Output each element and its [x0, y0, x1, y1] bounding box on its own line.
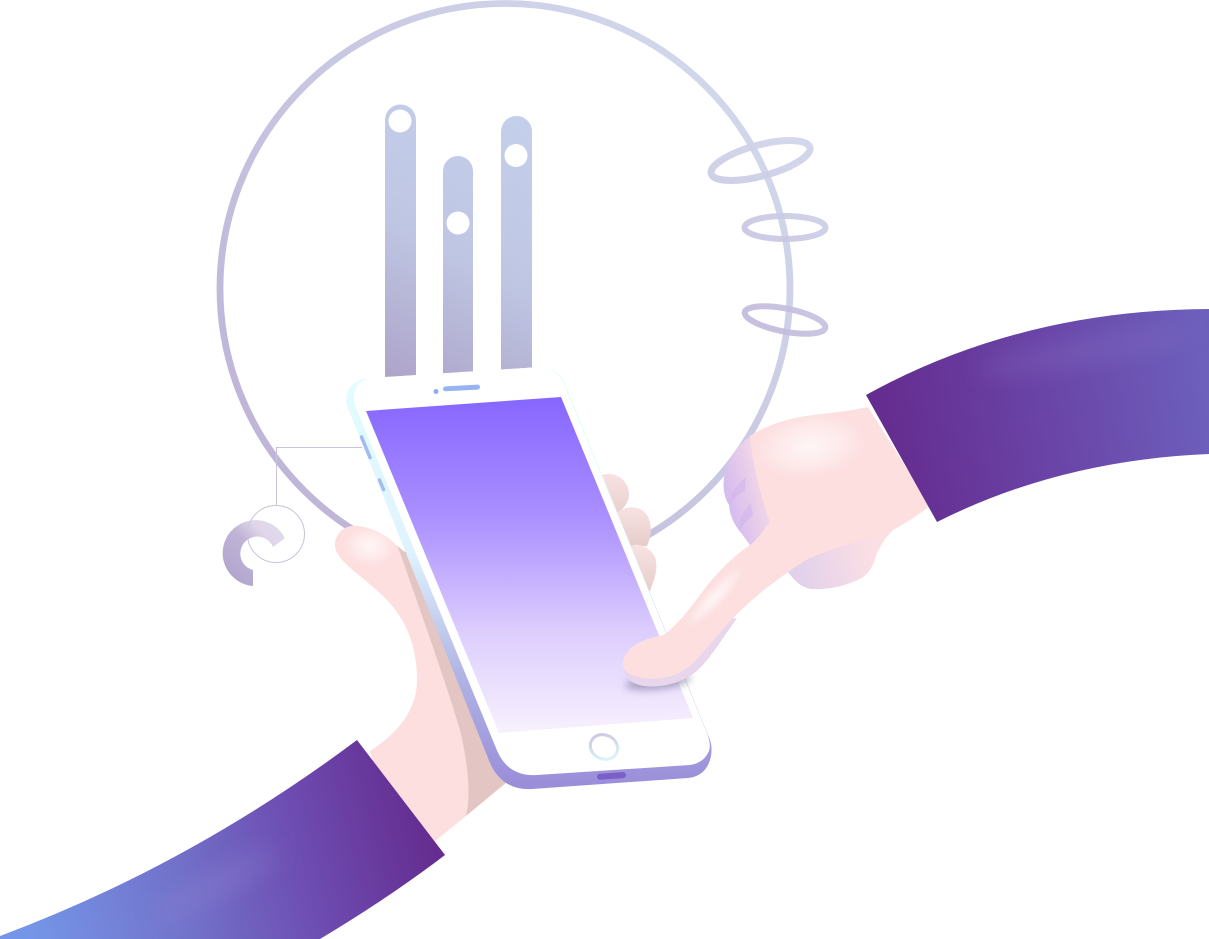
- ring 2: [744, 216, 826, 239]
- finger underside: [624, 618, 737, 686]
- home button: [586, 730, 622, 764]
- C-shaped arc icon: [223, 520, 285, 586]
- hand highlight: [750, 407, 870, 485]
- screen: [366, 397, 693, 733]
- hand and pointing finger: [623, 407, 930, 679]
- right arm: [623, 309, 1209, 692]
- bar 1: [385, 104, 416, 385]
- left arm: [0, 526, 507, 939]
- large circle outline: [220, 4, 790, 574]
- right sleeve: [866, 309, 1209, 522]
- bar 3: [501, 116, 532, 385]
- orbit rings: [707, 132, 827, 339]
- hand: [335, 526, 468, 842]
- speaker: [434, 385, 480, 394]
- charging port: [597, 772, 626, 780]
- side button 2: [380, 480, 384, 490]
- hand shadow side: [396, 545, 507, 816]
- phone body side: [346, 367, 712, 789]
- callout: thin line and circle: [248, 448, 362, 562]
- ring 3: [743, 301, 827, 339]
- fingertip shadow: [624, 672, 692, 692]
- bar chart: three rounded bars: [385, 104, 532, 385]
- bar 2: [443, 156, 473, 385]
- thumb highlight: [344, 526, 396, 566]
- phone: [346, 367, 712, 789]
- knuckles: [724, 435, 775, 548]
- left sleeve: [0, 740, 445, 939]
- finger highlight: [679, 559, 751, 635]
- curled fingers: [785, 505, 893, 589]
- phone face: [354, 367, 710, 775]
- ring 1: [707, 132, 814, 189]
- back fingers of left hand: [602, 474, 656, 593]
- side button 1: [362, 437, 370, 458]
